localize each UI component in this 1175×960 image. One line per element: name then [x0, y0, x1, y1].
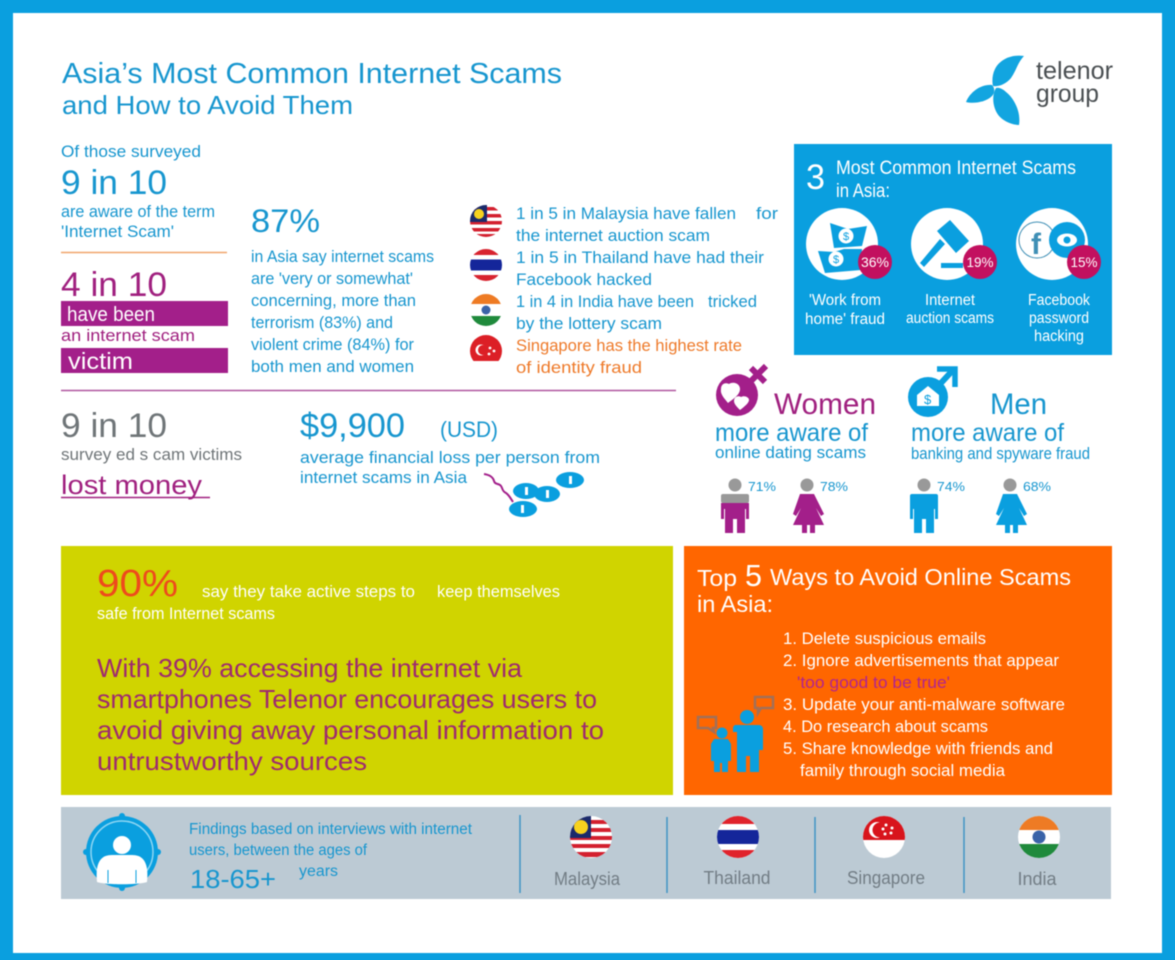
icon: Singapore flag	[863, 816, 905, 858]
facts text: for	[756, 204, 778, 223]
icon: man 71%: 71%	[748, 480, 776, 494]
stat: 9 in 10 aware: 'Internet Scam'	[61, 223, 174, 241]
stat: $9,900 average loss: $9,900	[300, 407, 405, 445]
stat: 9 in 10 lost money: survey ed s cam victims	[61, 445, 242, 464]
India	[1018, 816, 1060, 889]
facts text: tricked	[708, 292, 757, 311]
panel: 90% active steps: smartphones Telenor encourages users to	[97, 684, 597, 714]
panel: top 5 ways: family through social media	[800, 761, 1006, 780]
icon: woman 68%: 68%	[1023, 480, 1051, 494]
stat: 87% concerned: terrorism (83%) and	[251, 314, 393, 332]
scam captions: Internet	[925, 292, 976, 309]
icon: male symbol with house	[908, 369, 955, 417]
stat: 4 in 10 victims: an internet scam	[61, 326, 195, 345]
stat: 87% concerned: both men and women	[251, 358, 414, 376]
stat: 4 in 10 victims: have been	[67, 304, 155, 326]
icon: work from home 36%: 36%	[861, 254, 889, 270]
findings text	[189, 821, 473, 894]
facts text: 1 in 5 in Thailand have had their	[516, 248, 764, 267]
logo wordmark	[1036, 57, 1113, 108]
icon: man 74%	[910, 478, 965, 533]
title: Asia’s Most Common Internet Scams	[62, 58, 562, 90]
panel: 3 most common scams: Most Common Internet Scams	[836, 158, 1076, 179]
icon: facebook password 15%: f	[1031, 228, 1042, 261]
icon: work from home 36%: $	[843, 231, 849, 243]
stat: 9 in 10 aware: are aware of the term	[61, 203, 215, 221]
Malaysia: Malaysia	[554, 869, 621, 889]
icon: Singapore flag small	[470, 335, 502, 367]
panel: top 5 ways: Ways to Avoid Online Scams	[770, 564, 1071, 590]
men section	[908, 369, 1090, 533]
stat: 4 in 10 victims: 4 in 10	[61, 266, 167, 304]
panel: 3 most common scams	[794, 144, 1112, 355]
icon: woman 78%: 78%	[820, 480, 848, 494]
stat: 87% concerned: are 'very or somewhat'	[251, 270, 413, 288]
icon: facebook password 15%: 15%	[1070, 254, 1098, 270]
panel: top 5 ways: 5. Share knowledge with friends and	[783, 739, 1053, 758]
icon: Malaysia flag	[570, 816, 612, 858]
icon: work from home 36%	[806, 208, 892, 280]
icon: India flag small	[470, 294, 502, 326]
panel: 90% active steps: untrustworthy sources	[97, 746, 367, 776]
stat: $9,900 average loss: internet scams in Asia	[300, 468, 468, 487]
icon: auction gavel 19%: 19%	[966, 254, 994, 270]
panel: 90% active steps: say they take active steps to	[202, 582, 415, 601]
panel: top 5 ways: Top	[697, 565, 737, 591]
stat: 87% concerned: concerning, more than	[251, 292, 416, 310]
icon: parent and child with speech bubbles	[698, 697, 773, 772]
panel: top 5 ways: in Asia:	[697, 591, 773, 617]
icon: Thailand flag	[717, 816, 759, 858]
stat: 9 in 10 aware: Of those surveyed	[61, 142, 201, 161]
icon: Malaysia flag small	[470, 205, 502, 237]
stat: 87% concerned: in Asia say internet scams	[251, 248, 434, 266]
Malaysia	[554, 816, 621, 889]
scam captions: 'Work from	[809, 292, 881, 309]
logo wordmark: group	[1036, 80, 1099, 108]
findings text: Findings based on interviews with internet	[189, 821, 473, 838]
Thailand: Thailand	[704, 868, 770, 888]
stat: $9,900 average loss	[300, 407, 600, 487]
facts text: the internet auction scam	[516, 226, 710, 245]
scam captions	[805, 292, 1090, 345]
stat: $9,900 average loss: (USD)	[440, 417, 498, 442]
icon: telenor mark	[966, 56, 1024, 125]
icon: man 71%	[721, 478, 776, 533]
women section	[715, 366, 876, 533]
scam captions: home' fraud	[805, 311, 885, 328]
panel: footer findings	[61, 807, 1111, 899]
panel: top 5 ways	[684, 546, 1112, 795]
panel: 90% active steps: 90%	[97, 563, 178, 605]
icon: male symbol with house: $	[924, 392, 932, 407]
findings text: users, between the ages of	[189, 842, 368, 859]
icon: person in target	[83, 813, 161, 891]
panel: 3 most common scams: 3	[806, 158, 825, 197]
Singapore	[847, 816, 925, 888]
panel: top 5 ways: 4. Do research about scams	[783, 717, 988, 736]
icon: Thailand flag small	[470, 249, 502, 281]
icon: coins trail	[484, 472, 584, 517]
Singapore: Singapore	[847, 868, 925, 888]
icon: woman 68%	[996, 478, 1051, 533]
panel: top 5 ways: 1. Delete suspicious emails	[783, 629, 986, 648]
scam captions: Facebook	[1028, 292, 1090, 309]
facts text: 1 in 5 in Malaysia have fallen	[516, 204, 736, 223]
facts text: by the lottery scam	[516, 314, 662, 333]
panel: 90% active steps	[61, 546, 673, 795]
panel: 90% active steps: avoid giving away personal information to	[97, 715, 604, 745]
facts text	[516, 204, 778, 377]
stat: 9 in 10 aware	[61, 142, 215, 241]
panel: top 5 ways: 5	[745, 558, 762, 593]
stat: 87% concerned: 87%	[251, 203, 320, 239]
stat: 9 in 10 lost money: lost money	[61, 470, 203, 500]
stat: 87% concerned: violent crime (84%) for	[251, 336, 414, 354]
icon: work from home 36%: $	[833, 254, 839, 266]
scam captions: auction scams	[906, 310, 994, 327]
logo wordmark: telenor	[1036, 57, 1113, 85]
icon: India flag	[1018, 816, 1060, 858]
men section: more aware of	[911, 419, 1064, 447]
panel: top 5 ways: 3. Update your anti-malware software	[783, 695, 1065, 714]
panel: 3 most common scams: in Asia:	[836, 181, 890, 202]
India: India	[1018, 869, 1057, 889]
stat: 9 in 10 lost money	[61, 407, 242, 500]
stat: 9 in 10 lost money: 9 in 10	[61, 407, 167, 445]
findings text: years	[299, 863, 338, 880]
stat: 9 in 10 aware: 9 in 10	[61, 164, 167, 202]
facts text: of identity fraud	[516, 358, 642, 377]
facts text: 1 in 4 in India have been	[516, 292, 694, 311]
women section: online dating scams	[715, 443, 866, 462]
icon: female symbol with hearts	[716, 366, 766, 416]
stat: 87% concerned	[251, 203, 434, 376]
facts text: Facebook hacked	[516, 270, 652, 289]
title	[62, 58, 562, 120]
findings text: 18-65+	[190, 864, 276, 894]
telenor group logo	[966, 56, 1113, 125]
women section: more aware of	[715, 419, 868, 447]
icon: auction gavel 19%	[911, 208, 997, 280]
panel: top 5 ways: 'too good to be true'	[797, 673, 950, 692]
icon: woman 78%	[793, 478, 848, 533]
scam captions: password	[1029, 310, 1089, 327]
icon: man 74%: 74%	[937, 480, 965, 494]
panel: 90% active steps: keep themselves	[437, 582, 560, 601]
panel: 90% active steps: With 39% accessing the internet via	[97, 653, 523, 683]
stat: 4 in 10 victims	[61, 266, 228, 374]
stat: 4 in 10 victims: victim	[68, 348, 133, 374]
women section: Women	[774, 388, 876, 421]
country facts list	[470, 204, 778, 377]
facts text: Singapore has the highest rate	[516, 336, 742, 355]
men section: banking and spyware fraud	[911, 444, 1090, 463]
panel: 90% active steps: safe from Internet scams	[97, 604, 275, 623]
men section: Men	[990, 388, 1047, 421]
panel: top 5 ways: 2. Ignore advertisements that appear	[783, 651, 1059, 670]
scam captions: hacking	[1034, 328, 1084, 345]
title: and How to Avoid Them	[62, 90, 353, 120]
stat: $9,900 average loss: average financial loss per person from	[300, 448, 600, 467]
Thailand	[704, 816, 770, 888]
icon: facebook password 15%	[1016, 208, 1101, 280]
